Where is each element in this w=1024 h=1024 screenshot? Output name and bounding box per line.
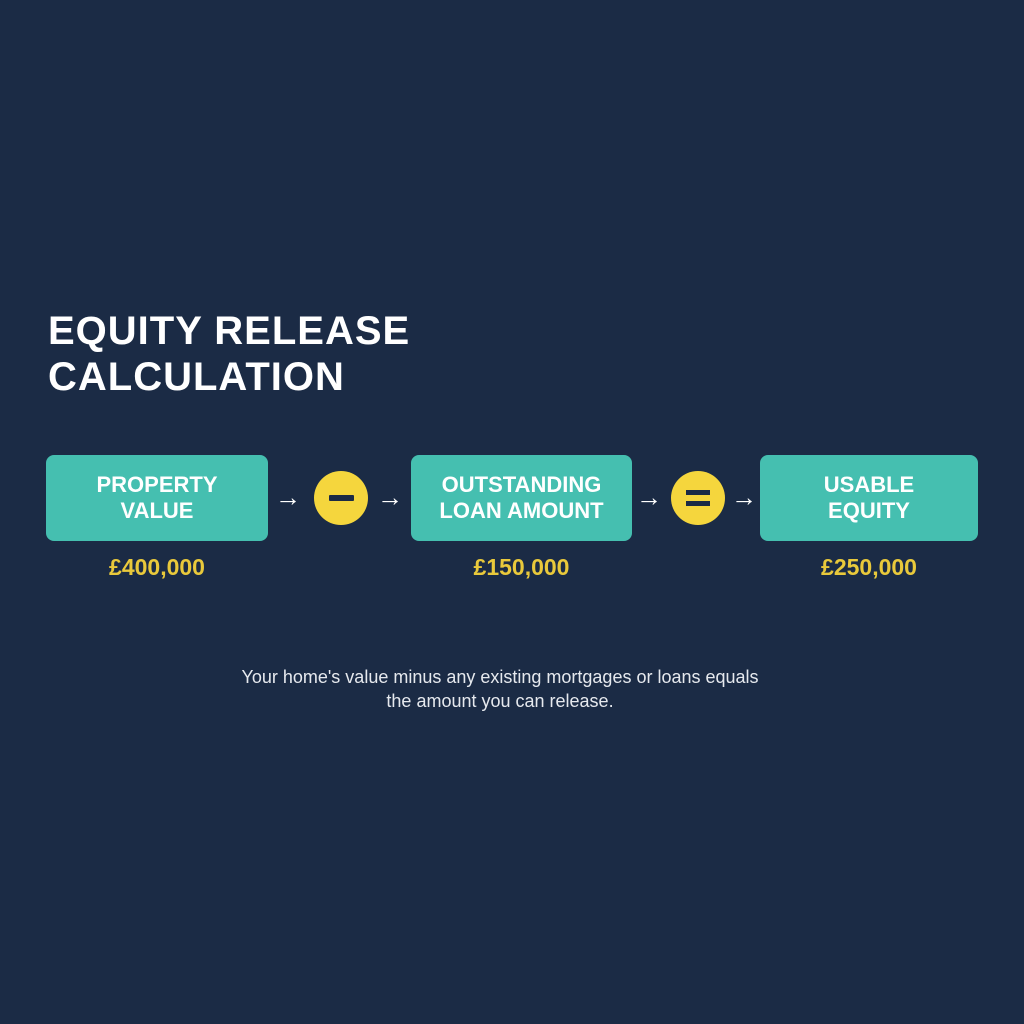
- icon: minus: [314, 471, 368, 525]
- box: outstanding loan: [411, 455, 632, 541]
- arrow 4: →: [731, 482, 757, 512]
- title: EQUITY RELEASE: [48, 309, 410, 353]
- caption: the amount you can release.: [386, 691, 614, 711]
- title: CALCULATION: [48, 355, 345, 399]
- box: property value: PROPERTY: [96, 472, 218, 497]
- title: [48, 309, 410, 399]
- icon: equals: [671, 471, 725, 525]
- box: usable equity: EQUITY: [828, 498, 910, 523]
- arrow 2: →: [377, 482, 403, 512]
- box: property value: [46, 455, 268, 541]
- amount: 400000: £400,000: [109, 554, 205, 580]
- amount: 150000: £150,000: [474, 554, 569, 580]
- caption: [241, 667, 759, 711]
- amount: 250000: £250,000: [821, 554, 917, 580]
- arrow 1: →: [275, 482, 301, 512]
- box: outstanding loan: OUTSTANDING: [442, 472, 601, 497]
- box: usable equity: [760, 455, 978, 541]
- box: outstanding loan: LOAN AMOUNT: [439, 498, 604, 523]
- box: usable equity: USABLE: [824, 472, 914, 497]
- caption: Your home's value minus any existing mortgages or loans equals: [241, 667, 759, 687]
- arrow 3: →: [636, 482, 662, 512]
- box: property value: VALUE: [121, 498, 193, 523]
